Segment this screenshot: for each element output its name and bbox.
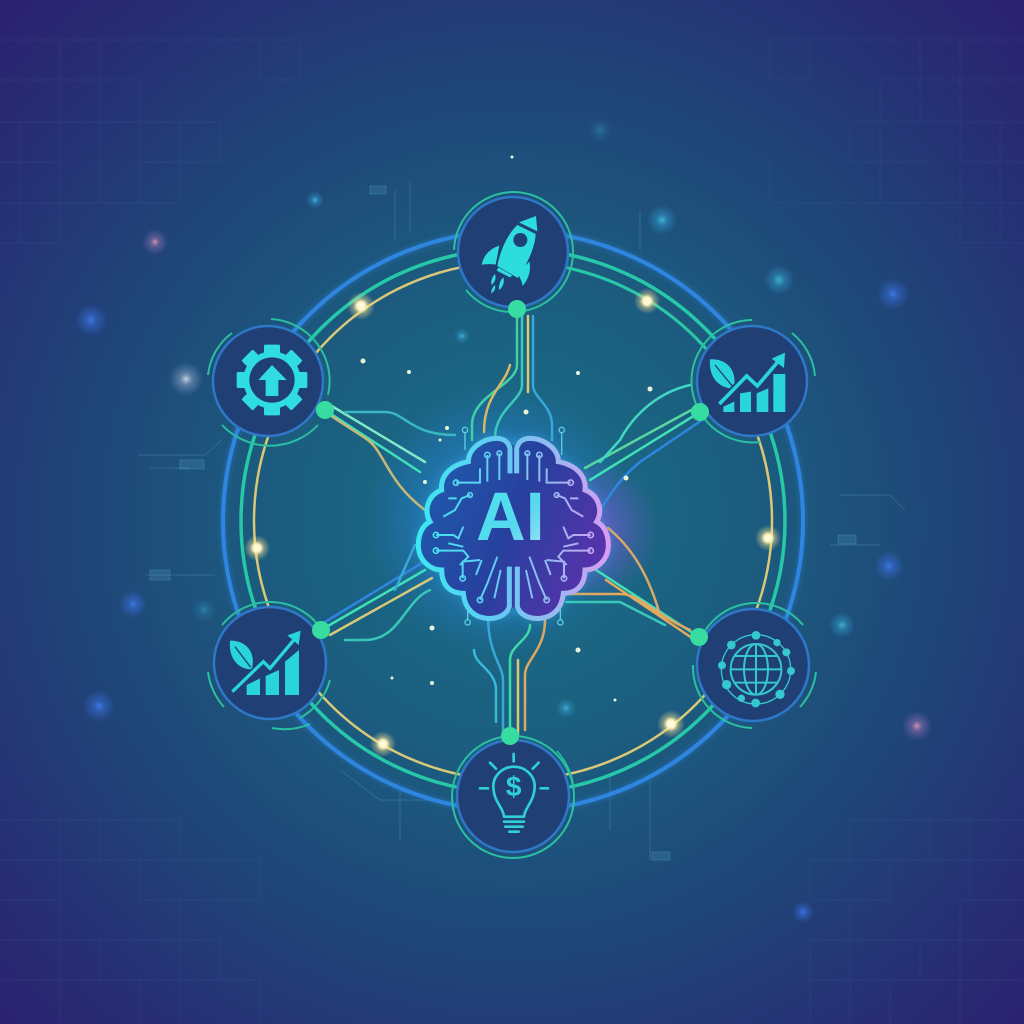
- node: leaf and growth chart upper right: [692, 320, 815, 442]
- brain outer traces: [462, 427, 564, 625]
- brain left hemisphere: [418, 438, 510, 618]
- glowing ring sparkles: [244, 288, 781, 757]
- small star particles: [360, 156, 652, 702]
- icon: globe with orbiting nodes: [718, 631, 795, 707]
- outer ring network: [223, 231, 803, 811]
- corner grid: top right: [770, 40, 1024, 243]
- green junction nodes: [312, 300, 709, 745]
- spoke traces: top: [472, 309, 552, 440]
- central glow: [365, 385, 635, 655]
- node: gear: [208, 319, 330, 446]
- corner grid: top left: [0, 40, 300, 243]
- spoke traces: lower right: [566, 528, 699, 640]
- spoke traces: lower left: [321, 545, 432, 640]
- brain right hemisphere: [517, 438, 608, 618]
- purple glow: [520, 460, 660, 600]
- background bokeh lights: [75, 118, 932, 923]
- node: globe: [693, 603, 816, 728]
- brain icon with AI label: [418, 427, 608, 625]
- spoke traces: upper left: [325, 405, 455, 510]
- node: lightbulb: [452, 736, 574, 858]
- icon: leaf and chart: [230, 631, 301, 695]
- spoke traces: bottom: [474, 615, 545, 736]
- corner grid: bottom left: [0, 820, 260, 1024]
- icon: rocket: [482, 216, 537, 293]
- dollar sign: $: [506, 771, 522, 802]
- brain body fill: [418, 438, 608, 618]
- icon: gear with up arrow: [237, 345, 307, 415]
- node: rocket: [454, 192, 573, 312]
- AI label: AI: [476, 478, 545, 555]
- icon: leaf and chart: [710, 353, 785, 412]
- spoke traces: upper right: [585, 385, 705, 510]
- node: leaf and growth chart lower left: [208, 602, 330, 729]
- faint circuit details: [138, 182, 905, 860]
- corner grid: bottom right: [810, 820, 1024, 1024]
- brain glow halo: [418, 438, 608, 618]
